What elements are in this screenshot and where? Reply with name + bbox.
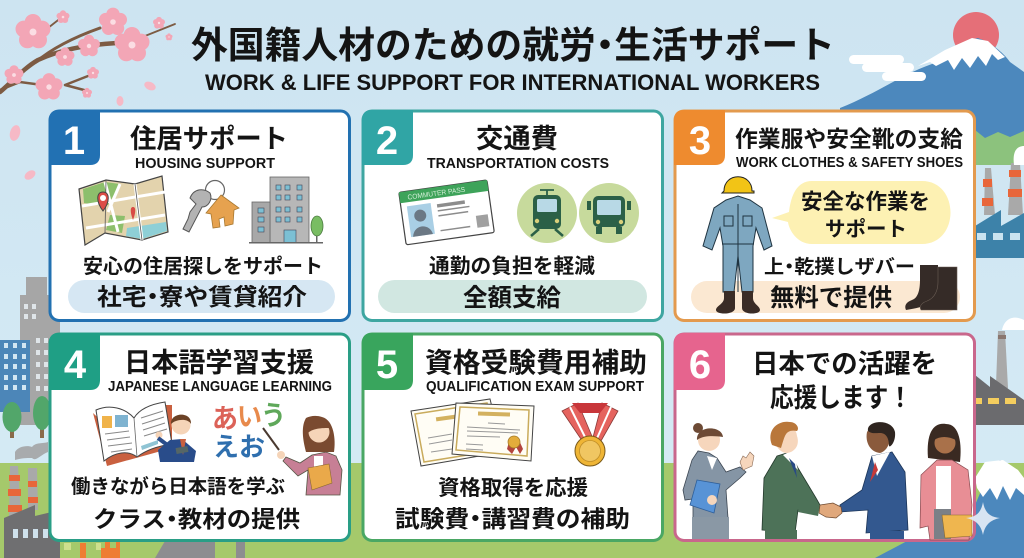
icon: train — [517, 183, 577, 243]
background grass — [0, 463, 1024, 558]
badge 3 — [674, 110, 725, 165]
english heading: TRANSPORTATION COSTS — [427, 155, 609, 172]
factory right gray — [975, 318, 1024, 425]
icon: hiragana — [212, 401, 286, 462]
icon: worker uniform — [703, 177, 772, 314]
mountain bottom right — [875, 460, 1024, 558]
icon: female teacher — [263, 416, 342, 495]
heading: 資格受験費用補助 — [425, 347, 647, 378]
panel: encouragement — [674, 333, 974, 540]
description: 働きながら日本語を学ぶ — [71, 475, 285, 498]
icon: map — [79, 176, 168, 245]
factory left — [4, 442, 245, 558]
figure: woman in pink jacket — [920, 424, 972, 540]
english heading: WORK CLOTHES & SAFETY SHOES — [736, 155, 963, 171]
figure: handshake — [819, 503, 842, 518]
icon: hiragana: あ — [212, 404, 238, 434]
icon: bus — [579, 183, 639, 243]
panel: exam support — [362, 333, 662, 540]
badge 2 — [362, 110, 413, 165]
icon: medal — [562, 403, 618, 466]
badge 2: 2 — [376, 119, 398, 163]
badge 5 — [362, 333, 413, 390]
highlight text: 無料で提供 — [770, 285, 892, 312]
factory right blue — [975, 146, 1024, 258]
panel: work clothes — [674, 110, 974, 320]
heading: 日本での活躍を — [752, 349, 937, 379]
icon: safety boots — [905, 265, 957, 310]
highlight pill: 全額支給 — [463, 284, 561, 312]
mountain top right — [840, 12, 1024, 165]
icon: certificates — [411, 399, 534, 466]
badge 6: 6 — [689, 343, 711, 387]
heading: 作業服や安全靴の支給 — [735, 126, 963, 152]
english heading: HOUSING SUPPORT — [135, 155, 275, 172]
highlight pill — [691, 281, 960, 313]
figure: man in blue suit — [840, 422, 908, 539]
icon: hiragana: い — [237, 402, 262, 432]
icon: hiragana: えお — [213, 432, 265, 462]
title: 外国籍人材のための就労・生活サポート — [191, 25, 835, 66]
heading line 2: 応援します！ — [770, 383, 912, 413]
badge 3: 3 — [689, 119, 711, 163]
description: 通勤の負担を軽減 — [429, 254, 596, 278]
speech bubble — [772, 181, 950, 244]
icon: hiragana: う — [261, 401, 286, 431]
badge 5: 5 — [376, 343, 398, 387]
panel: japanese learning — [49, 333, 350, 540]
highlight text: クラス・教材の提供 — [93, 506, 300, 532]
panel: transportation — [362, 110, 662, 320]
icon: buildings — [249, 177, 323, 244]
heading: 住居サポート — [130, 124, 288, 154]
badge 4 — [49, 333, 100, 390]
cloud top right — [849, 55, 926, 81]
description: 資格取得を応援 — [438, 477, 588, 500]
highlight text: 試験費・講習費の補助 — [395, 506, 630, 532]
subtitle: WORK & LIFE SUPPORT FOR INTERNATIONAL WORKERS — [205, 70, 820, 95]
english heading: JAPANESE LANGUAGE LEARNING — [108, 378, 332, 395]
description: 上・乾撲しザバー — [764, 256, 915, 278]
description: 安心の住居探しをサポート — [83, 255, 323, 278]
badge 6 — [674, 333, 725, 390]
icon: textbook — [93, 402, 172, 466]
sparkle — [966, 502, 1000, 535]
speech bubble: 安全な作業を — [801, 190, 930, 214]
highlight pill: 社宅・寮や賃貸紹介 — [97, 284, 307, 310]
figure: woman with folder — [683, 423, 754, 539]
panel: housing support — [49, 110, 350, 320]
figure: man in green suit — [762, 422, 820, 539]
heading: 日本語学習支援 — [124, 348, 314, 378]
speech bubble: サポート — [825, 218, 907, 241]
badge 4: 4 — [64, 343, 87, 387]
heading: 交通費 — [476, 124, 558, 154]
highlight pill — [378, 280, 647, 313]
badge 1 — [49, 110, 100, 165]
badge 1: 1 — [63, 119, 85, 163]
icon: commuter pass: COMMUTER PASS — [407, 187, 466, 202]
city left — [0, 277, 60, 438]
highlight pill — [68, 280, 335, 313]
icon: male teacher — [156, 415, 196, 462]
icon: commuter pass — [399, 180, 494, 245]
icon: key and house — [183, 180, 239, 232]
english heading: QUALIFICATION EXAM SUPPORT — [426, 378, 644, 395]
cherry branch — [0, 8, 175, 182]
